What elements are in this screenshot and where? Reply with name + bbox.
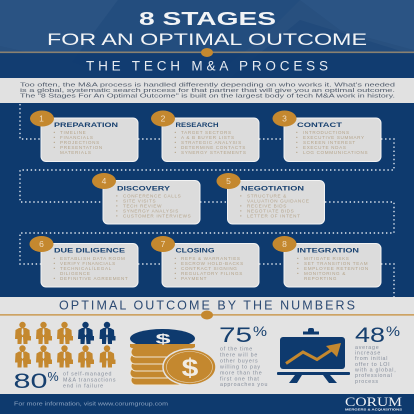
list: closing: • (174, 276, 177, 281)
list: contact: • (296, 150, 298, 155)
list: preparation: PROJECTIONS (60, 140, 100, 145)
badge 8: 8 (282, 239, 287, 249)
list: negotiation: • (240, 214, 242, 218)
list: negotiation: • (240, 194, 242, 198)
list: contact: LOG COMMUNICATIONS (303, 150, 368, 155)
list: integration: • (297, 266, 299, 271)
badge 4: 4 (102, 176, 107, 186)
heading: contact: CONTACT (297, 122, 342, 129)
list: closing: CONTRACT SIGNING (181, 266, 238, 271)
badge 2: 2 (161, 114, 166, 124)
heading: negotiation: NEGOTIATION (241, 186, 304, 192)
heading: discovery: DISCOVERY (117, 186, 171, 192)
stage 6: due diligence (30, 236, 138, 287)
icon: coin stack: $ (182, 353, 198, 381)
list: contact: • (296, 130, 298, 135)
icon: presentation board with rising arrow (277, 328, 350, 383)
list: discovery (116, 194, 191, 218)
dotted process path (20, 104, 394, 297)
list: research (174, 130, 247, 155)
list: due diligence (54, 256, 128, 281)
list: discovery: • (116, 198, 118, 204)
stage 7: closing (151, 236, 259, 287)
stat: 75 percent: willing to pay (220, 364, 261, 370)
logo: Corum: MERGERS & ACQUISITIONS (345, 408, 402, 412)
list: integration: MONITORING & (304, 271, 346, 276)
list: negotiation: VALUATION GUIDANCE (247, 198, 310, 204)
stat: 48 percent: process (355, 379, 379, 385)
list: due diligence: DILIGENCE (60, 271, 91, 276)
list: contact: INTRODUCTIONS (303, 130, 350, 135)
list: negotiation: • (240, 204, 242, 208)
list: preparation: • (54, 130, 56, 135)
list: closing (174, 256, 244, 281)
badge 3: 3 (282, 114, 287, 124)
header background (0, 0, 414, 78)
list: research: • (174, 145, 177, 150)
stat: 75 percent: approaches you (220, 382, 268, 388)
intro text block: The "8 Stages For An Optimal Outcome" is built on the largest body of tech M&A work in history. (20, 94, 395, 100)
title (47, 8, 367, 49)
list: preparation (54, 130, 103, 155)
list: negotiation (240, 194, 310, 218)
list: negotiation: • (240, 208, 242, 214)
list: preparation: • (54, 145, 56, 150)
stat: 48 percent: from initial (355, 356, 388, 362)
stat: 48 percent: professional (355, 373, 393, 379)
list: closing: PAYMENT (181, 276, 207, 281)
list: discovery: • (116, 194, 118, 198)
heading: closing: CLOSING (176, 248, 214, 254)
list: research: STRATEGIC ANALYSIS (181, 140, 242, 145)
list: closing: • (174, 261, 177, 266)
stage 8: integration (272, 236, 381, 287)
heading: preparation: PREPARATION (54, 122, 118, 129)
list: due diligence: DEFINITIVE AGREEMENT (60, 276, 128, 281)
list: closing: • (174, 256, 177, 261)
stat: 48 percent: increase (355, 350, 381, 356)
stat: 48 percent: % (386, 323, 400, 339)
footer (0, 394, 414, 414)
list: negotiation: NEGOTIATE BIDS (247, 208, 294, 214)
list: contact: • (296, 135, 298, 140)
stage 1: preparation (30, 110, 138, 162)
icon: coin stack (130, 329, 216, 385)
stat: 80 percent: M&A transactions (63, 378, 116, 384)
stat: 48 percent: average (355, 345, 379, 351)
list: discovery: • (116, 214, 118, 218)
list: discovery: SITE VISITS (123, 198, 156, 204)
panel: numbers (0, 297, 414, 394)
icon: coin stack: $ (155, 331, 171, 347)
list: preparation: TIMELINE (60, 130, 86, 135)
heading: integration: INTEGRATION (297, 248, 359, 254)
list: due diligence: • (54, 266, 56, 271)
list: closing: • (174, 271, 177, 276)
list: integration: SET TRANSITION TEAM (304, 261, 368, 266)
stage 3: contact (272, 110, 381, 162)
list: contact: • (296, 140, 298, 145)
list: closing: REGULATORY FILINGS (181, 271, 243, 276)
list: discovery: • (116, 208, 118, 214)
list: integration: • (297, 271, 299, 276)
list: integration: EMPLOYEE RETENTION (304, 266, 369, 271)
list: preparation: FINANCIALS (60, 135, 94, 140)
heading: research: RESEARCH (176, 122, 219, 129)
list: due diligence: VERIFY FINANCIALS (60, 261, 116, 266)
logo: Corum (345, 395, 402, 412)
list: research: TARGET SECTORS (181, 130, 232, 135)
list: research: SYNERGY STATEMENTS (181, 150, 247, 155)
stat: 75 percent: there will be (220, 352, 258, 358)
stat: 75 percent (219, 323, 268, 388)
list: research: • (174, 140, 177, 145)
stat: 75 percent: % (253, 323, 267, 339)
stage 2: research (151, 110, 259, 162)
list: closing: REPS & WARRANTIES (181, 256, 241, 261)
icon: people, 80 percent (15, 322, 116, 368)
list: due diligence: • (54, 261, 56, 266)
stat: 80 percent: 80 (14, 370, 48, 393)
intro text block: is a global, systematic search process for that partner that will give you an optimal outcome. (20, 88, 395, 94)
title: 8 STAGES (139, 8, 276, 29)
badge 7: 7 (161, 239, 166, 249)
list: research: A & B BUYER LISTS (181, 135, 235, 140)
list: negotiation: RECEIVE BIDS (247, 204, 287, 208)
stat: 75 percent: of the time (220, 346, 253, 352)
list: due diligence: TECHNICAL/LEGAL (60, 266, 112, 271)
stat: 75 percent: 75 (219, 324, 252, 347)
list: negotiation: LETTER OF INTENT (247, 214, 301, 218)
stat: 48 percent: with a global, (355, 368, 396, 374)
stat: 80 percent: end in failure (63, 384, 104, 390)
list: discovery: CONFERENCE CALLS (123, 194, 181, 198)
list: due diligence: • (54, 256, 56, 261)
stat: 75 percent: more than the (220, 370, 262, 376)
list: discovery: • (116, 204, 118, 208)
stage 4: discovery (92, 173, 200, 224)
stat: 80 percent (14, 370, 116, 393)
list: research: • (174, 130, 177, 135)
list: preparation: PRESENTATION (60, 145, 103, 150)
list: contact: • (296, 145, 298, 150)
list: integration: MITIGATE RISKS (304, 256, 350, 261)
intro text block: Too often, the M&A process is handled differently depending on who works it. What's needed (20, 82, 395, 88)
title: FOR AN OPTIMAL OUTCOME (47, 31, 367, 49)
list: contact: EXECUTE NDAS (303, 145, 347, 150)
list: preparation: • (54, 135, 56, 140)
stat: 75 percent: other buyers (220, 358, 258, 364)
badge 5: 5 (226, 176, 231, 186)
numbers divider with dot (0, 310, 414, 320)
list: preparation: MATERIALS (60, 150, 92, 155)
list: closing: • (174, 266, 177, 271)
process background (0, 103, 414, 297)
list: contact: SCREEN INTEREST (303, 140, 356, 145)
stat: 80 percent: % (48, 370, 59, 384)
intro text block (0, 78, 414, 103)
list: research: DETERMINE CONTACTS (181, 145, 246, 150)
list: contact (296, 130, 368, 155)
list: preparation: • (54, 140, 56, 145)
list: integration: • (297, 256, 299, 261)
stat: 48 percent (355, 323, 400, 385)
list: research: • (174, 150, 177, 155)
stat: 48 percent: offer to LOI (355, 362, 390, 368)
list: due diligence: ESTABLISH DATA ROOM (60, 256, 125, 261)
badge 1: 1 (39, 114, 44, 124)
list: discovery: TECH REVIEW (123, 204, 162, 208)
badge 6: 6 (39, 239, 44, 249)
list: due diligence: • (54, 276, 56, 281)
subtitle: THE TECH M&A PROCESS (86, 58, 328, 74)
list: discovery: SYNERGY ANALYSIS (123, 208, 179, 214)
list: integration: • (297, 261, 299, 266)
list: discovery: CUSTOMER INTERVIEWS (123, 214, 191, 218)
stage 5: negotiation (216, 173, 324, 224)
stat: 48 percent: 48 (355, 324, 385, 347)
stat: 75 percent: first one that (220, 376, 260, 382)
stat: 80 percent: of self-managed (63, 372, 112, 378)
list: contact: EXECUTIVE SUMMARY (303, 135, 365, 140)
heading: due diligence: DUE DILIGENCE (54, 248, 126, 254)
footer link text: For more information, visit www.corumgroup.com (14, 402, 169, 408)
title divider with dot (0, 48, 414, 57)
logo: Corum: CORUM (345, 395, 402, 409)
list: integration: REPORTING (304, 276, 337, 281)
list: negotiation: STRUCTURE & (247, 194, 287, 198)
list: integration (297, 256, 369, 281)
numbers heading: OPTIMAL OUTCOME BY THE NUMBERS (59, 298, 355, 312)
list: research: • (174, 135, 177, 140)
list: closing: ESCROW HOLD-BACKS (181, 261, 244, 266)
